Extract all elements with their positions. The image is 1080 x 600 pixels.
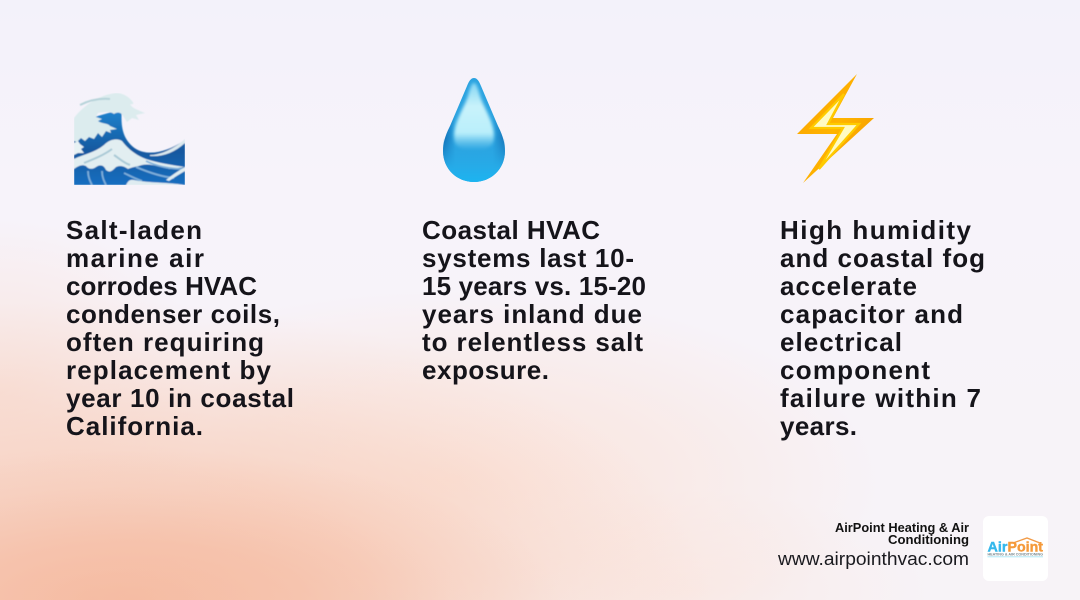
icon: lightning bolt (797, 74, 874, 183)
logo wordmark: HEATING & AIR CONDITIONING (988, 552, 1044, 556)
text block: humidity: capacitor and (780, 299, 963, 329)
text block: lifespan: exposure. (422, 355, 549, 385)
text block: salt air: marine air (66, 243, 204, 273)
logo wordmark: Point (1008, 540, 1044, 554)
text block: humidity: electrical (780, 327, 902, 357)
text block: lifespan: 15 years vs. 15-20 (422, 271, 646, 301)
text block: humidity: and coastal fog (780, 243, 985, 273)
text block: salt air: corrodes HVAC (66, 271, 257, 301)
text block: humidity: High humidity (780, 215, 972, 245)
text block: salt air: year 10 in coastal (66, 383, 294, 413)
logo tile (983, 516, 1048, 581)
text block: salt air: often requiring (66, 327, 264, 357)
text block: lifespan (422, 215, 646, 385)
company name: Conditioning (888, 533, 969, 547)
text block: humidity: failure within 7 (780, 383, 981, 413)
logo wordmark: Air (988, 540, 1008, 554)
text block: lifespan: years inland due (422, 299, 642, 329)
text block: salt air: Salt-laden (66, 215, 202, 245)
text block: humidity: years. (780, 411, 857, 441)
text block: lifespan: systems last 10- (422, 243, 634, 273)
company name: AirPoint Heating & Air (835, 521, 969, 535)
text block: salt air (66, 215, 294, 441)
text block: lifespan: to relentless salt (422, 327, 643, 357)
text block: humidity: component (780, 355, 930, 385)
text block: salt air: California. (66, 411, 203, 441)
text block: humidity (780, 215, 985, 441)
text block: salt air: replacement by (66, 355, 272, 385)
icon: wave (74, 93, 185, 185)
text block: lifespan: Coastal HVAC (422, 215, 600, 245)
text block: humidity: accelerate (780, 271, 917, 301)
logo wordmark (988, 537, 1044, 558)
icon: water drop (443, 78, 505, 182)
website url: www.airpointhvac.com (777, 549, 969, 569)
company name (835, 521, 969, 547)
text block: salt air: condenser coils, (66, 299, 280, 329)
